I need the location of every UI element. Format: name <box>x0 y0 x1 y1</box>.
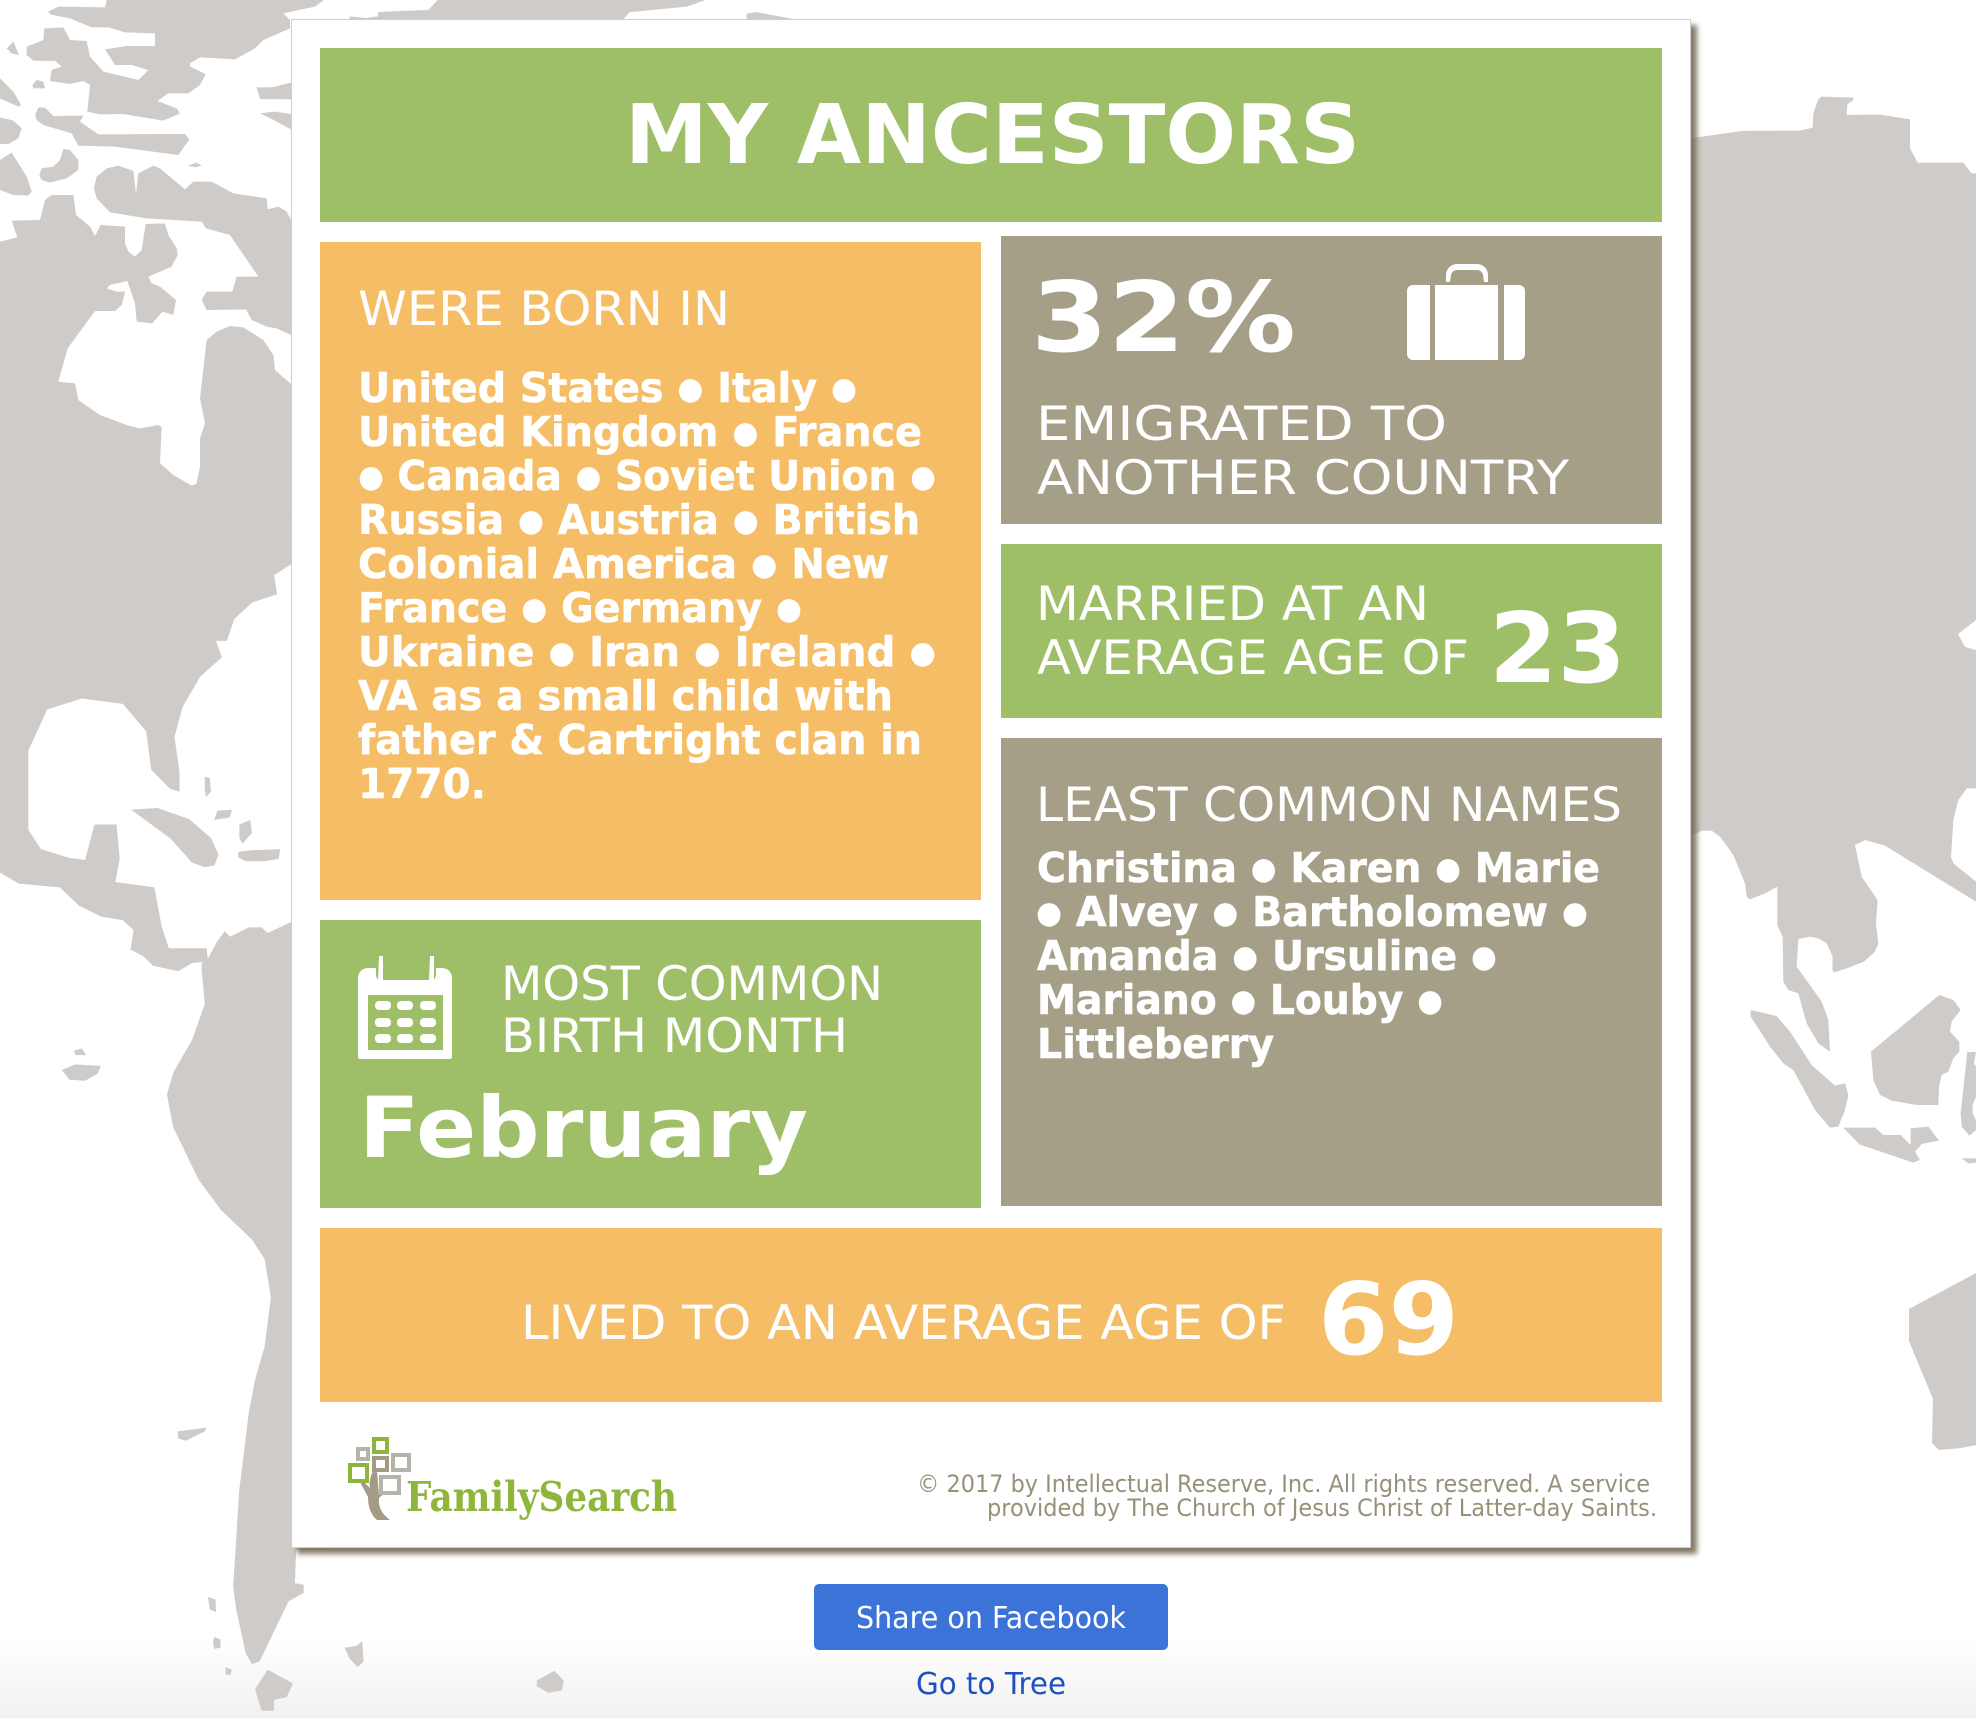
label: emigrated: EMIGRATED TO <box>1036 397 1447 452</box>
share button: Share on Facebook <box>856 1601 1127 1636</box>
stat: 69: 69 <box>1318 1261 1459 1378</box>
panel: married age <box>1001 544 1662 718</box>
title banner <box>320 48 1662 222</box>
list of birth places <box>358 364 936 808</box>
stat: 23: 23 <box>1489 592 1626 705</box>
label: most common birth month: MOST COMMON <box>501 957 883 1012</box>
logo: FamilySearch <box>350 1439 677 1521</box>
heading: were born in: WERE BORN IN <box>358 282 730 337</box>
icon: tree <box>350 1439 409 1520</box>
list of birth places: United Kingdom ● France <box>358 408 922 456</box>
list of birth places: France ● Germany ● <box>358 584 802 632</box>
copyright notice <box>917 1470 1657 1522</box>
list of names: Christina ● Karen ● Marie <box>1037 844 1600 892</box>
link: go to tree: Go to Tree <box>916 1667 1066 1702</box>
logo wordmark: FamilySearch <box>406 1473 677 1521</box>
stat: 32%: 32% <box>1031 261 1296 374</box>
label: married: MARRIED AT AN <box>1036 577 1429 632</box>
icon: suitcase <box>1407 264 1525 360</box>
white report card <box>291 19 1691 1548</box>
list of names: Amanda ● Ursuline ● <box>1037 932 1497 980</box>
list of names: Mariano ● Louby ● <box>1037 976 1443 1024</box>
list of names <box>1036 844 1600 1068</box>
list of birth places: ● Canada ● Soviet Union ● <box>358 452 936 500</box>
list of birth places: Russia ● Austria ● British <box>358 496 920 544</box>
panel: emigrated <box>1001 236 1662 524</box>
list of birth places: Colonial America ● New <box>358 540 889 588</box>
list of birth places: father & Cartright clan in <box>358 716 922 764</box>
list of birth places: Ukraine ● Iran ● Ireland ● <box>358 628 936 676</box>
copyright notice: provided by The Church of Jesus Christ of Latter-day Saints. <box>987 1494 1657 1522</box>
panel: least common names <box>1001 738 1662 1206</box>
icon: calendar <box>358 956 452 1059</box>
list of birth places: United States ● Italy ● <box>358 364 857 412</box>
list of birth places: VA as a small child with <box>358 672 893 720</box>
panel: birth month: BIRTH MONTH <box>501 1009 848 1064</box>
panel: married age: AVERAGE AGE OF <box>1037 631 1469 686</box>
list of names: ● Alvey ● Bartholomew ● <box>1036 888 1588 936</box>
stat: February: February <box>359 1079 808 1177</box>
title banner: MY ANCESTORS <box>625 88 1360 183</box>
share button <box>814 1584 1168 1650</box>
list of birth places: 1770. <box>358 760 486 808</box>
panel: were born in <box>320 242 981 900</box>
copyright notice: © 2017 by Intellectual Reserve, Inc. All rights reserved. A service <box>917 1470 1650 1498</box>
label: lived to: LIVED TO AN AVERAGE AGE OF <box>521 1296 1286 1351</box>
list of names: Littleberry <box>1037 1020 1274 1068</box>
panel: lifespan <box>320 1228 1662 1402</box>
heading: least common names: LEAST COMMON NAMES <box>1036 778 1622 833</box>
panel: birth month <box>320 920 981 1208</box>
panel: emigrated: ANOTHER COUNTRY <box>1037 451 1570 506</box>
